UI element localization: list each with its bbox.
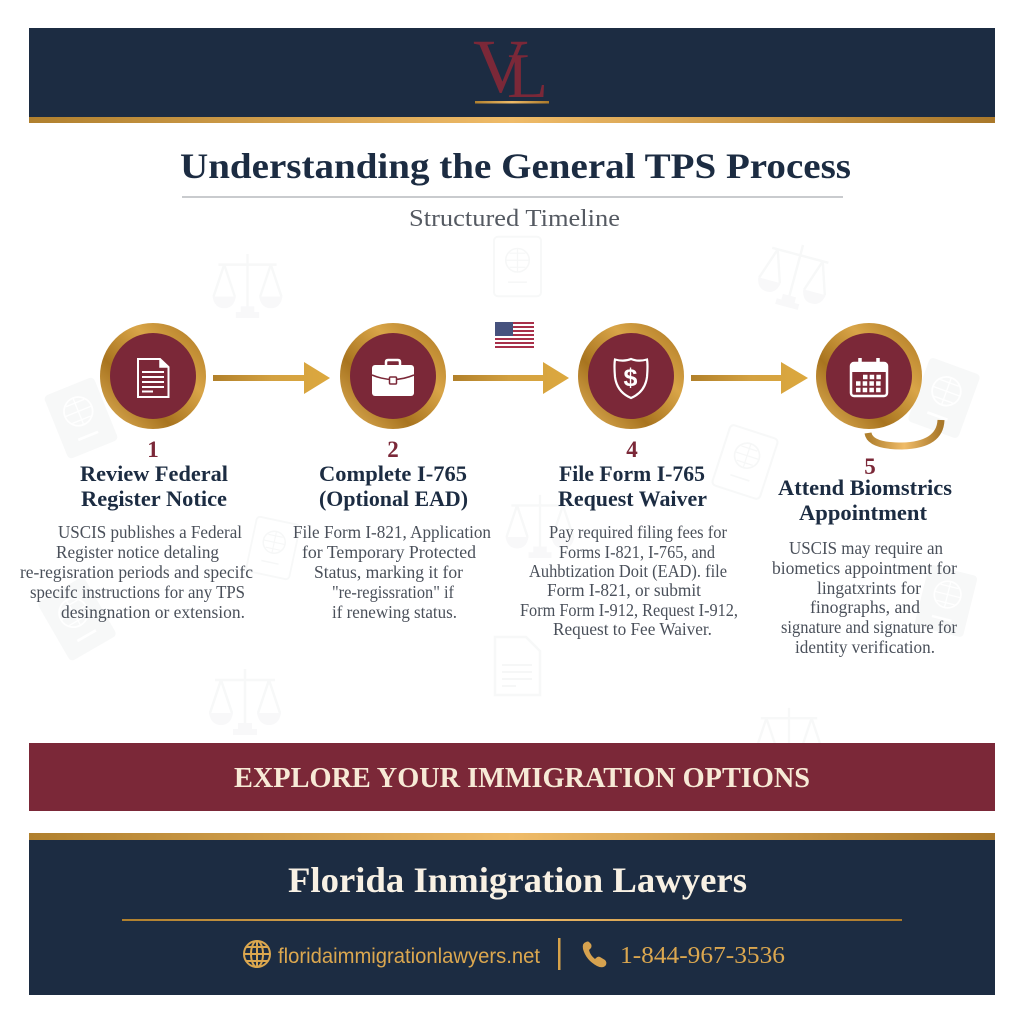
step number 4: 4 xyxy=(626,437,638,462)
step heading 2: Complete I-765 xyxy=(319,461,467,486)
icon: dollar shield xyxy=(578,323,684,429)
step body 2: File Form I-821, Application xyxy=(293,522,491,542)
step body 1: specifc instructions for any TPS xyxy=(30,582,245,602)
step body 5: signature and signature for xyxy=(781,617,957,637)
step body 5: identity verification. xyxy=(795,637,935,657)
step 2 xyxy=(293,323,491,622)
step heading 4: File Form I-765 xyxy=(559,461,705,486)
icon: briefcase xyxy=(340,323,446,429)
step body 2: Status, marking it for xyxy=(314,562,463,582)
step number 1: 1 xyxy=(147,437,159,462)
step body 1: USCIS publishes a Federal xyxy=(58,522,242,542)
step body 4: Request to Fee Waiver. xyxy=(553,619,712,639)
logo: V xyxy=(473,25,528,109)
step heading 4: Request Waiver xyxy=(558,486,707,511)
step body 4: Form Form I-912, Request I-912, xyxy=(520,600,738,620)
icon: globe xyxy=(244,941,270,967)
website: floridaimmigrationlawyers.net xyxy=(278,945,540,968)
watermark icons xyxy=(37,236,981,770)
arrow 1 to 2 xyxy=(213,362,330,394)
arrow 4 to 5 xyxy=(691,362,808,394)
footer panel xyxy=(29,833,995,995)
firm name: Florida Inmigration Lawyers xyxy=(288,860,747,900)
watermark: document xyxy=(495,637,540,695)
step body 5: USCIS may require an xyxy=(789,538,943,558)
step heading 4 xyxy=(558,461,707,511)
icon: US flag xyxy=(495,322,534,348)
top banner xyxy=(29,25,995,123)
step body 1: desingnation or extension. xyxy=(61,602,245,622)
step body 4: Form I-821, or submit xyxy=(547,580,701,600)
step body 4: Pay required filing fees for xyxy=(549,522,727,542)
call to action banner xyxy=(29,743,995,811)
arrow 2 to 4 xyxy=(453,362,569,394)
step body 5 xyxy=(772,538,957,657)
icon: calendar xyxy=(816,323,922,429)
step body 5: lingatxrints for xyxy=(817,578,921,598)
step 4 xyxy=(520,323,738,639)
step body 4: Auhbtization Doit (EAD). file xyxy=(529,561,727,581)
step heading 1 xyxy=(80,461,228,511)
step heading 5 xyxy=(778,475,952,525)
step number 2: 2 xyxy=(387,437,399,462)
step body 2: if renewing status. xyxy=(332,602,457,622)
step body 4 xyxy=(520,522,738,639)
step 1 xyxy=(20,323,253,622)
step body 5: finographs, and xyxy=(810,597,920,617)
step body 1 xyxy=(20,522,253,622)
call to action banner: EXPLORE YOUR IMMIGRATION OPTIONS xyxy=(234,762,810,794)
step body 1: Register notice detaling xyxy=(56,542,219,562)
icon: document xyxy=(100,323,206,429)
subtitle: Structured Timeline xyxy=(409,206,620,232)
icon: phone xyxy=(583,942,606,967)
step body 2: "re-regissration" if xyxy=(332,582,454,602)
phone number: 1-844-967-3536 xyxy=(620,943,785,969)
curved connector xyxy=(868,420,941,446)
step body 5: biometics appointment for xyxy=(772,558,957,578)
step body 4: Forms I-821, I-765, and xyxy=(559,542,715,562)
footer rule xyxy=(122,919,902,921)
step body 2: for Temporary Protected xyxy=(302,542,476,562)
step body 1: re-regisration periods and specifc xyxy=(20,562,253,582)
logo: L xyxy=(507,40,548,111)
step body 2 xyxy=(293,522,491,622)
step heading 5: Appointment xyxy=(799,500,928,525)
step heading 1: Review Federal xyxy=(80,461,228,486)
step number 5: 5 xyxy=(864,454,876,479)
title: Understanding the General TPS Process xyxy=(180,146,851,186)
step heading 2 xyxy=(319,461,468,511)
icon: dollar shield: $ xyxy=(624,364,638,392)
step heading 5: Attend Biomstrics xyxy=(778,475,952,500)
step heading 2: (Optional EAD) xyxy=(319,486,468,511)
title rule xyxy=(182,196,843,198)
step heading 1: Register Notice xyxy=(81,486,227,511)
contact divider xyxy=(558,938,560,970)
step 5 xyxy=(772,323,957,657)
